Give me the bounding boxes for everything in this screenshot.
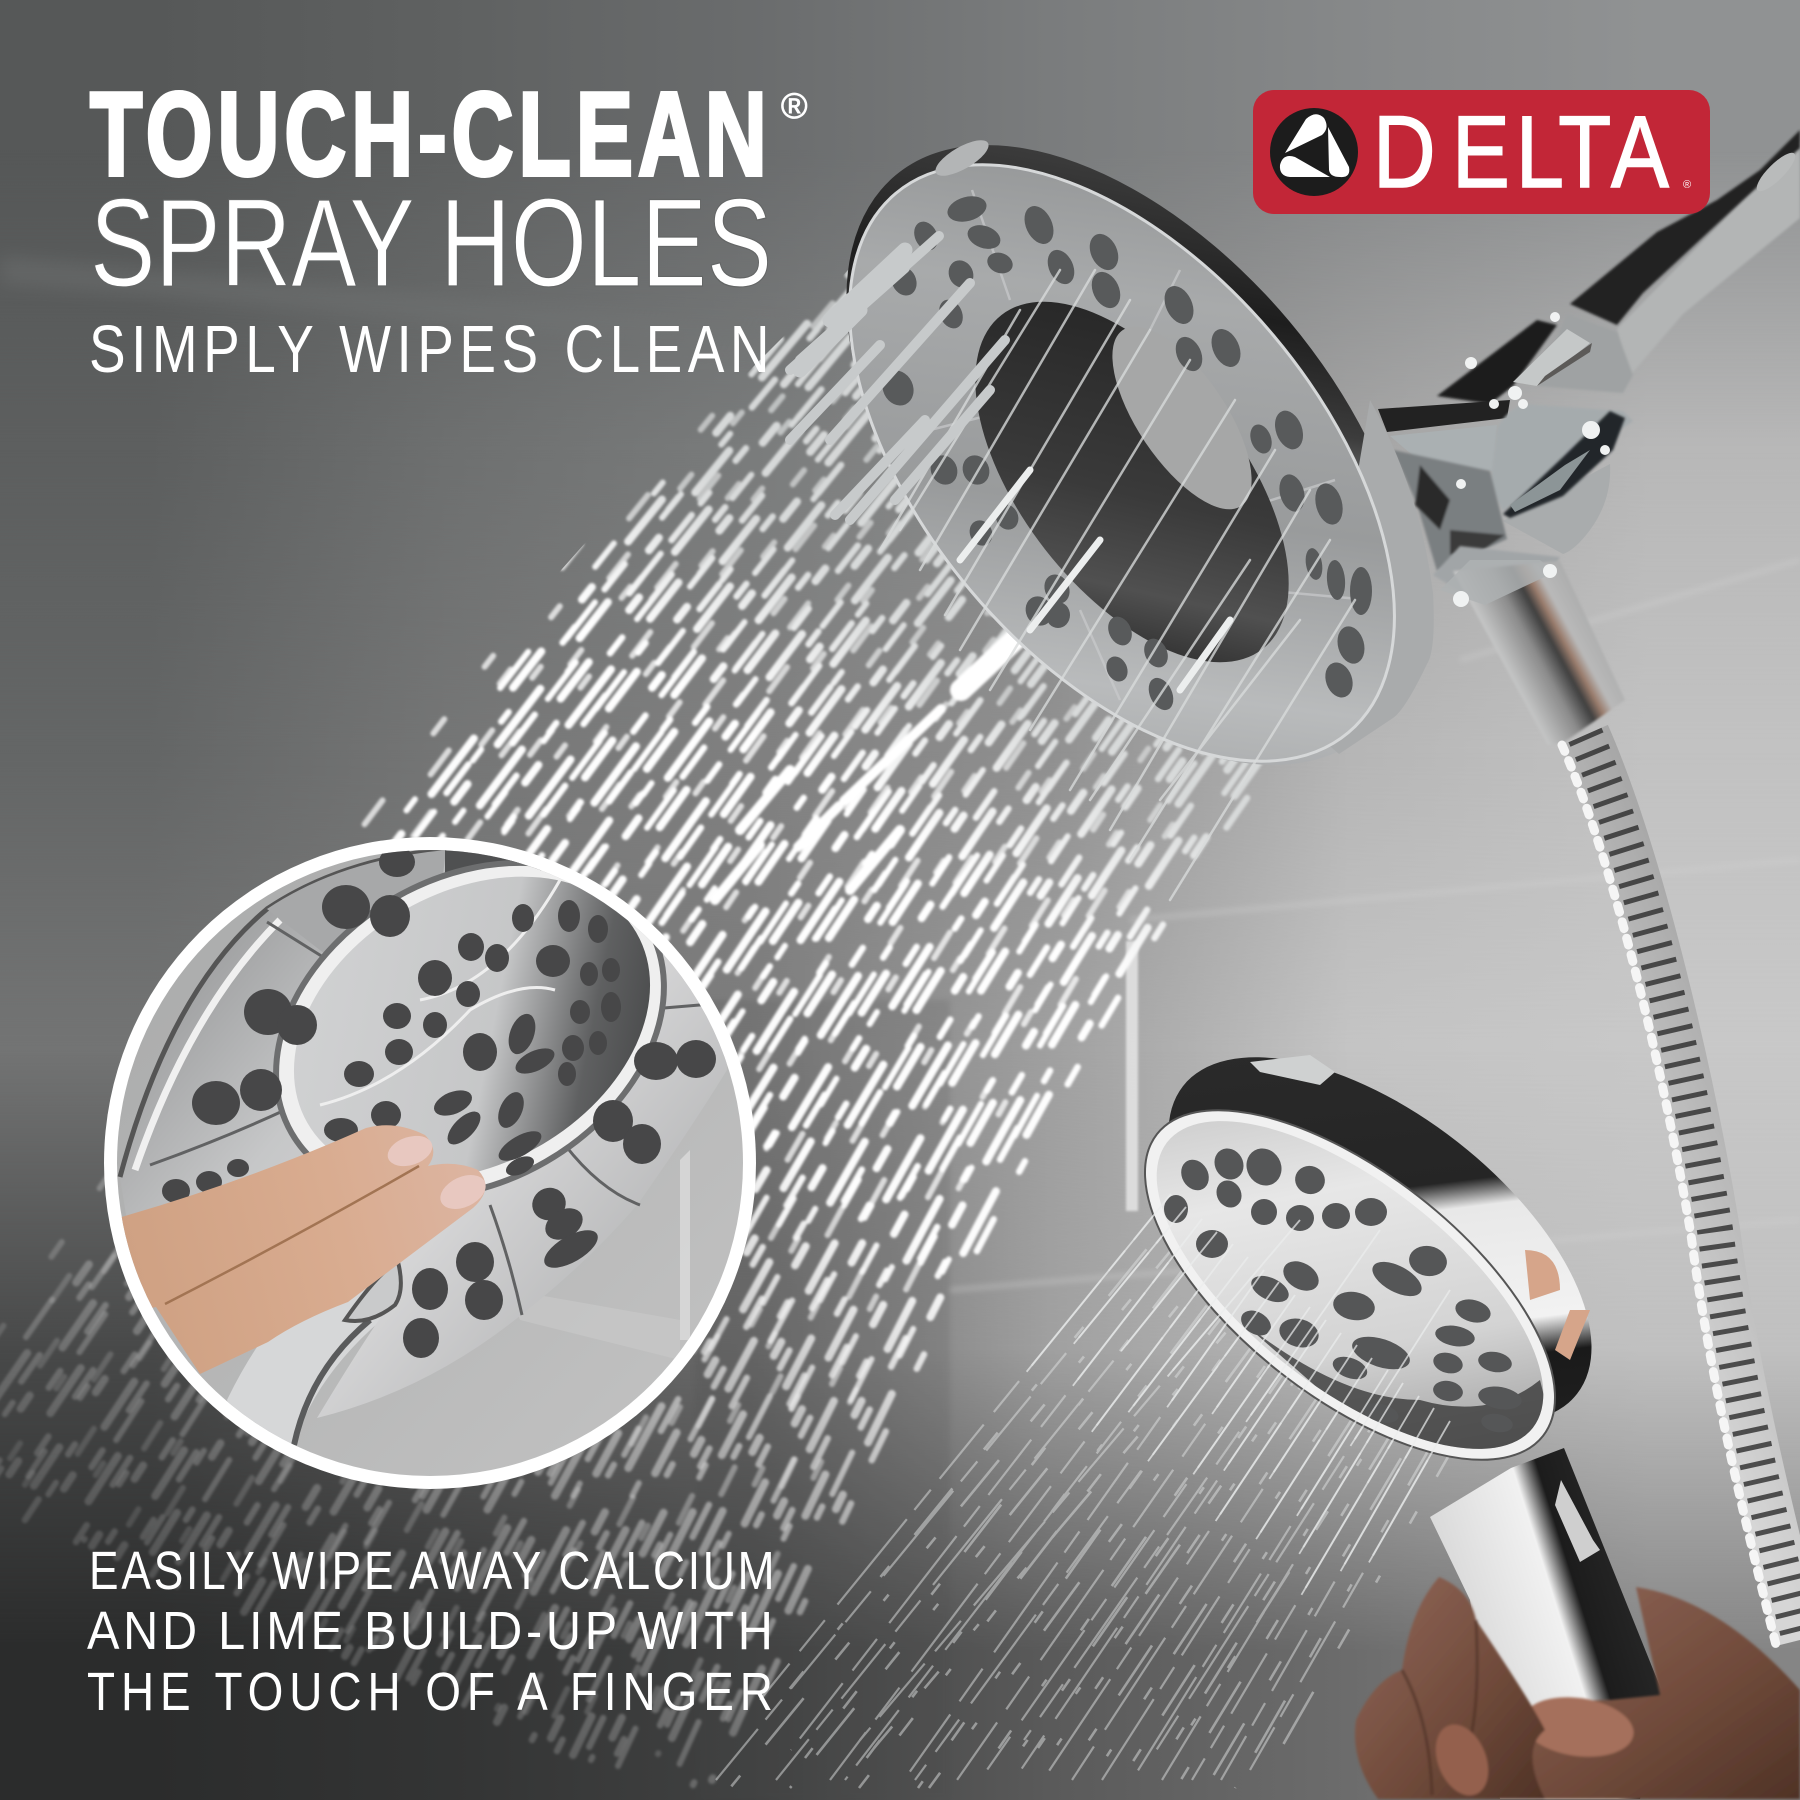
finger shadow: [1402, 1620, 1477, 1795]
clamp: [1490, 404, 1633, 511]
flexible metal hose: [1562, 735, 1800, 1645]
wall light reflection bar: [1126, 941, 1138, 1211]
rounded back plate: [1503, 464, 1610, 554]
mount arm: [736, 42, 1800, 900]
fingers: [100, 1125, 485, 1374]
outer chrome ring: [120, 849, 727, 1418]
lower lip: [1314, 400, 1434, 754]
bottom caption: EASILY WIPE AWAY CALCIUM: [89, 1541, 775, 1601]
dark reflection bands: [267, 850, 445, 952]
crease between fingers: [165, 1166, 419, 1304]
bottom caption: AND LIME BUILD-UP WITH: [87, 1600, 773, 1661]
top highlight: [931, 133, 993, 183]
ring face: [744, 66, 1500, 860]
emblem circle: [1270, 108, 1358, 196]
holes: [162, 847, 716, 1358]
sleeve: [1537, 314, 1633, 393]
segment seams: [150, 922, 735, 1315]
spray face: [1104, 1062, 1596, 1508]
wordmark: DELTA: [1373, 95, 1669, 210]
bottom caption: THE TOUCH OF A FINGER: [87, 1662, 773, 1722]
sparkles: [1453, 312, 1610, 607]
upper arm light side: [1617, 140, 1800, 379]
white ring: [104, 837, 756, 1489]
heading: Spray Holes: SPRAY HOLES: [90, 174, 772, 313]
inner disc petals: [320, 880, 560, 1105]
swivel joint: [1393, 450, 1507, 571]
title: Touch-Clean: TOUCH-CLEAN: [90, 67, 767, 200]
thin and thick water jets crossing the head: [790, 236, 1355, 900]
see-through opening: [1086, 306, 1278, 530]
finger nail: [1426, 1717, 1498, 1800]
top window highlight: [1250, 1055, 1335, 1085]
lower dark reflection: [1240, 1320, 1544, 1449]
handle: [1430, 1448, 1665, 1799]
bottom caption: [87, 1541, 775, 1722]
nails: [388, 1136, 432, 1166]
inset photo: [117, 850, 743, 1476]
body shell: [1106, 988, 1654, 1492]
thumb nail: [1519, 1690, 1637, 1764]
title: Touch-Clean: ®: [781, 85, 808, 126]
connector bar: [1378, 400, 1510, 432]
arm tip highlight: [1752, 148, 1800, 196]
Delta logo badge: [1253, 90, 1710, 214]
water spray from the overhead shower: [0, 226, 1299, 1787]
subheading: Simply Wipes Clean: SIMPLY WIPES CLEAN: [89, 312, 770, 386]
badge background: [1253, 90, 1710, 214]
inner spray disc: [273, 860, 667, 1191]
connector tube: [1453, 561, 1625, 745]
upper arm dark strip: [1570, 130, 1800, 325]
wall seam: [680, 1150, 690, 1340]
outer rim: [736, 42, 1524, 868]
spray holes on hand shower: [1164, 1142, 1524, 1435]
ring segment seams: [930, 190, 1370, 700]
spray holes: [877, 192, 1372, 714]
skin reflection on body: [1525, 1250, 1590, 1360]
fingers: [1355, 1577, 1545, 1799]
hand gripping the handle: [1355, 1577, 1800, 1800]
clamp dark slot: [1503, 411, 1625, 518]
handle stem: [227, 1288, 381, 1444]
collar: [1433, 546, 1560, 604]
loop on handle: [345, 1262, 401, 1321]
hand-held shower: [1088, 988, 1665, 1799]
registered mark: ®: [1683, 179, 1691, 191]
emblem drops: [1280, 114, 1349, 177]
water jets from hand shower, under head: [716, 1194, 1464, 1788]
water jets from hand shower, over face: [716, 1194, 1450, 1780]
rim: [1088, 1046, 1612, 1524]
inset circle: finger wiping spray holes: [100, 795, 760, 1500]
palm and thumb: [1500, 1587, 1800, 1799]
dark tube: [915, 247, 1349, 717]
